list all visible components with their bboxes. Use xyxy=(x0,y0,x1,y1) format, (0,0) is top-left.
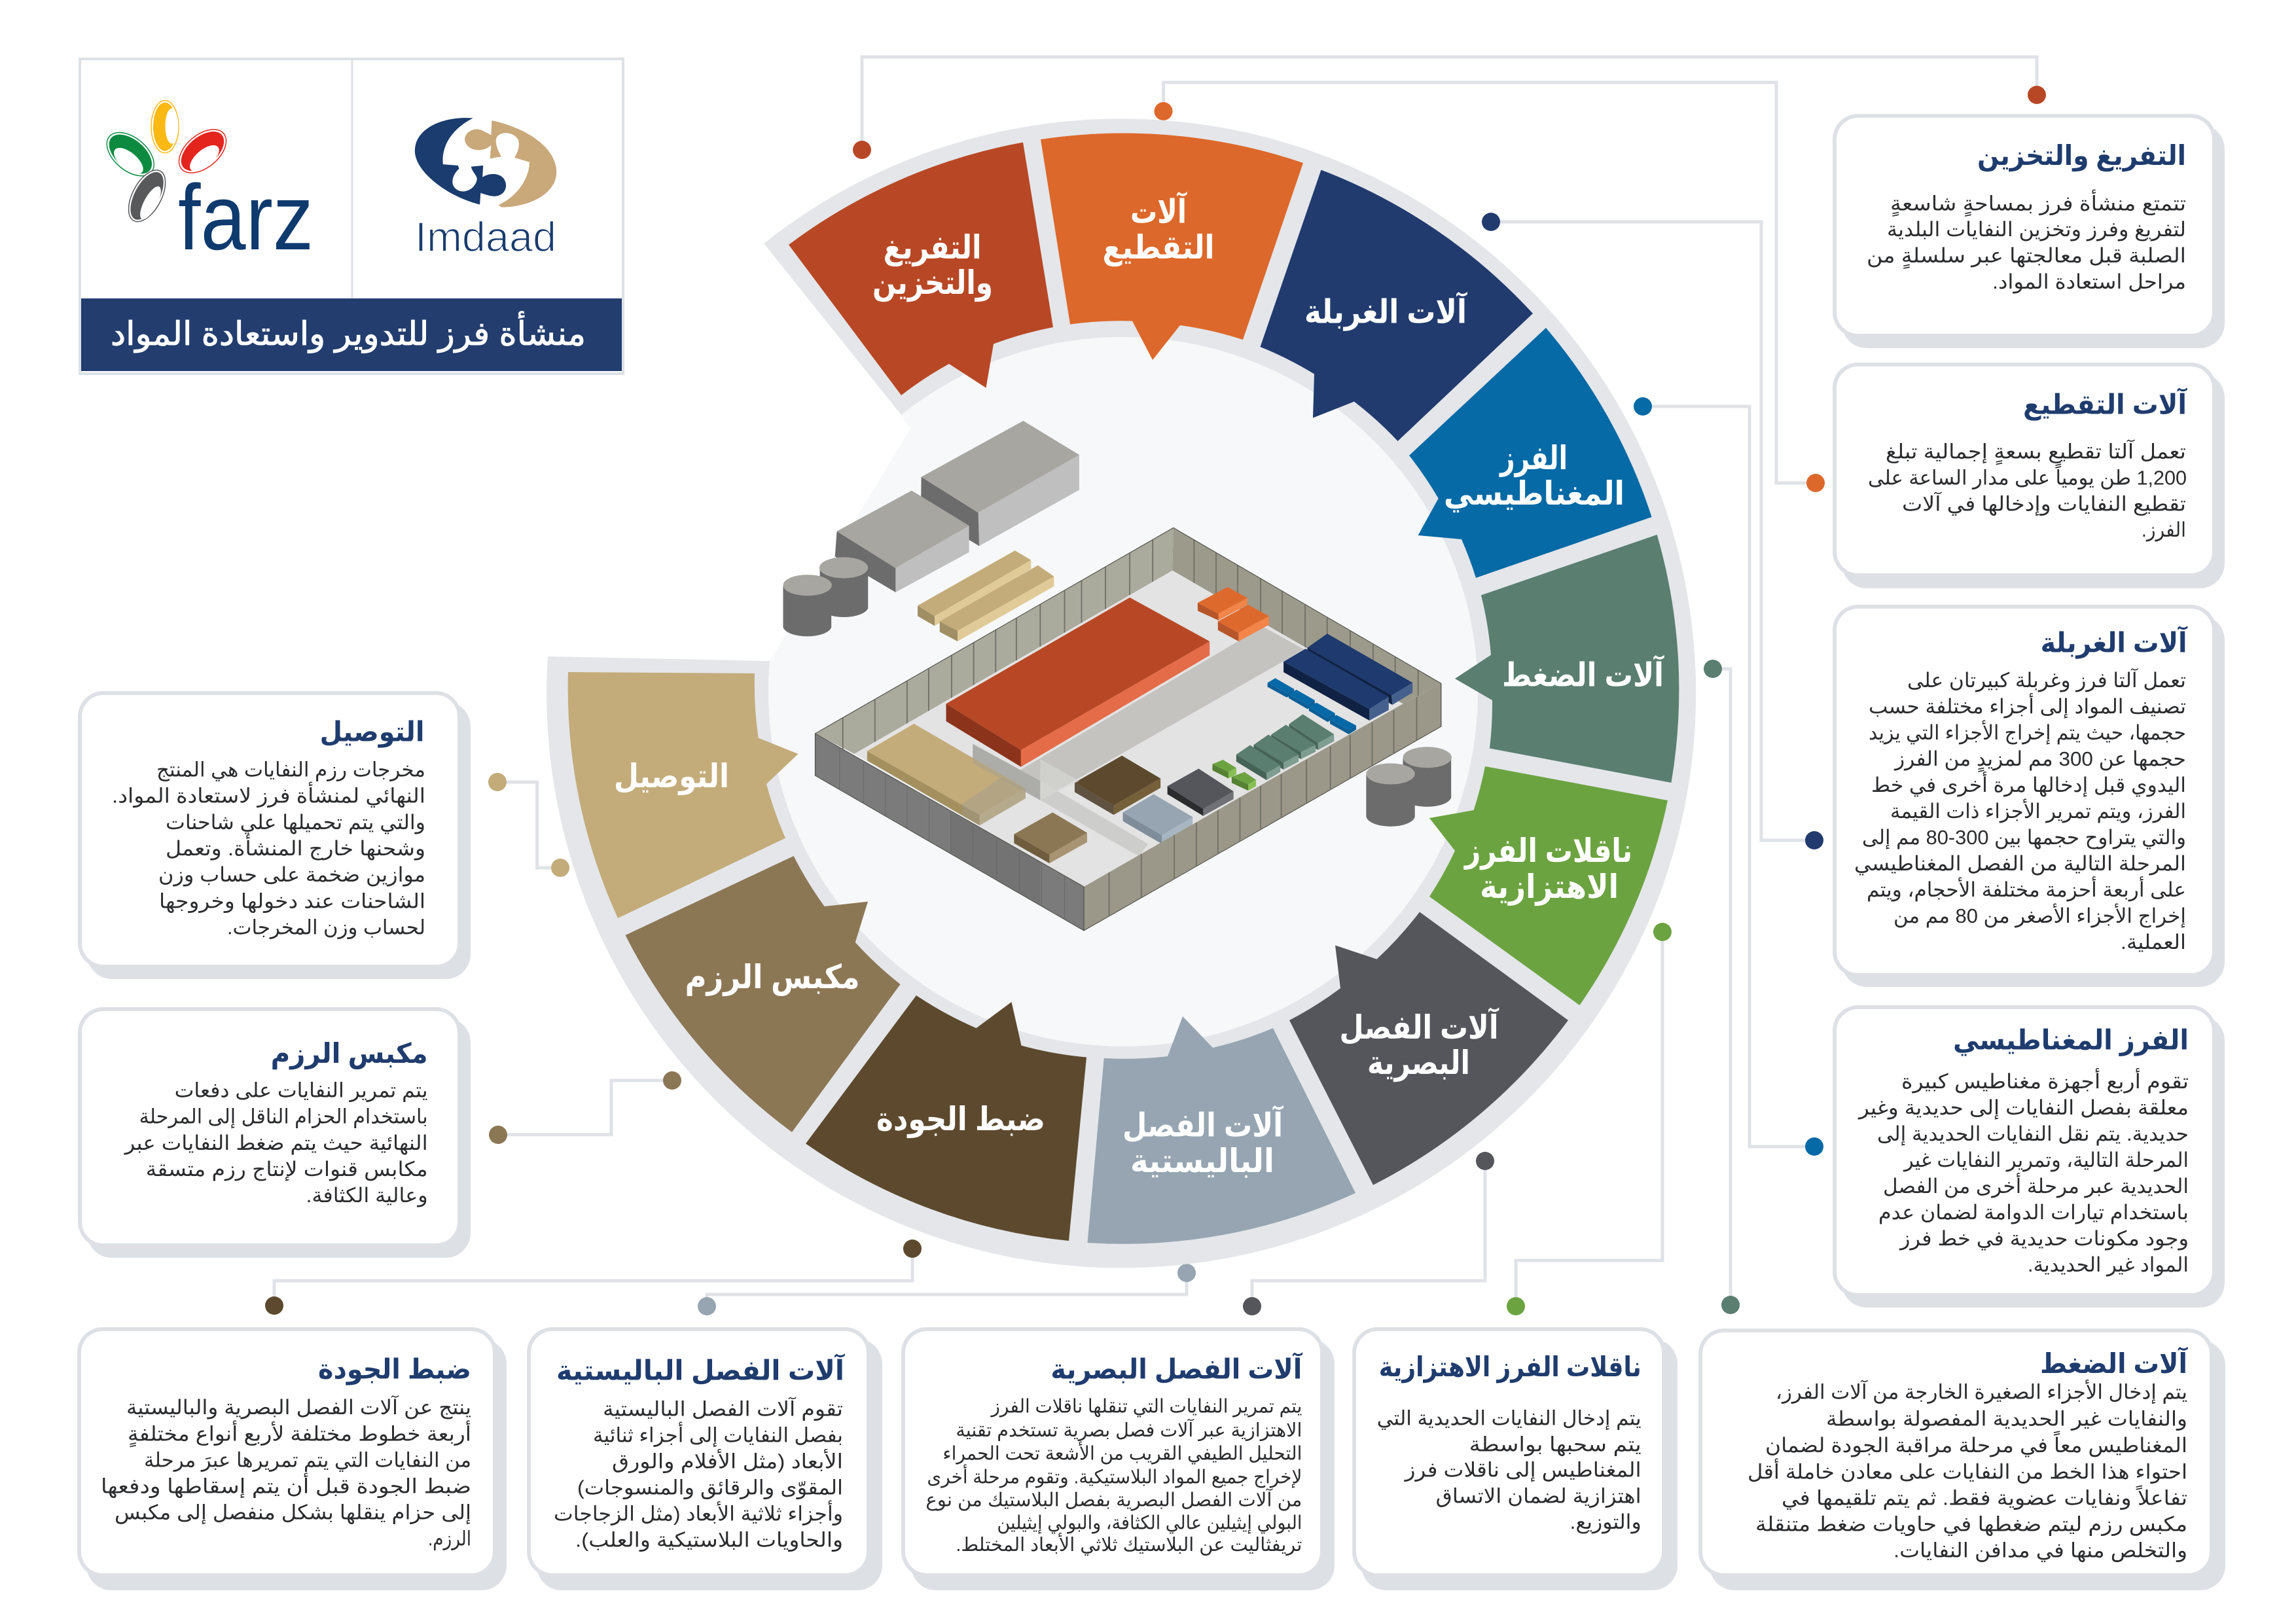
heading: ناقلات الفرز الاهتزازية xyxy=(1379,1351,1641,1383)
heading: الفرز المغناطيسي xyxy=(1953,1025,2189,1057)
body text: باستخدام تيارات الدوامة لضمان عدم xyxy=(1878,1201,2189,1224)
body text: وأجزاء ثلاثية الأبعاد (مثل الزجاجات xyxy=(554,1500,843,1525)
body text: والحاويات البلاستيكية والعلب). xyxy=(575,1528,843,1552)
logo: imdaad xyxy=(415,118,556,260)
logo: farz: farz xyxy=(178,166,314,270)
segment: compactors xyxy=(1455,535,1679,783)
panel: ballistic separators xyxy=(529,1329,882,1590)
outside tan slabs xyxy=(918,550,1054,641)
segment: optical separators xyxy=(1289,912,1568,1185)
body text: والتخلص منها في مدافن النفايات. xyxy=(1893,1539,2187,1562)
unit: dispatch tan xyxy=(867,724,1079,825)
body text: مخرجات رزم النفايات هي المنتج xyxy=(156,758,425,782)
body text xyxy=(925,1396,1302,1556)
building floor xyxy=(854,571,1403,887)
body text xyxy=(112,758,425,939)
body text: أربعة خطوط مختلفة لأربع أنواع مختلفةٍ xyxy=(128,1421,471,1448)
outside tanks right xyxy=(1366,747,1452,827)
body text: وجود مكونات حديدية في خط فرز xyxy=(1899,1227,2189,1251)
body text: يتم إدخال النفايات الحديدية التي xyxy=(1377,1407,1641,1431)
body text: موازين ضخمة على حساب وزن xyxy=(158,863,425,887)
body text: مراحل استعادة المواد. xyxy=(1992,270,2186,294)
segment: delivery xyxy=(568,672,798,918)
body text: لتفريغ وفرز وتخزين النفايات البلدية xyxy=(1887,218,2186,241)
body text: الحديدية عبر مرحلة أخرى من الفصل xyxy=(1883,1173,2189,1198)
heading: ضبط الجودة xyxy=(318,1354,471,1386)
body text: يتم تمرير النفايات التي تنقلها ناقلات الفرز xyxy=(990,1396,1302,1418)
segment: vibrating conveyors: ناقلات الفرز xyxy=(1463,832,1632,870)
unit: optical dark grey xyxy=(1168,768,1234,816)
heading: مكبس الرزم xyxy=(271,1038,428,1070)
body text: الصلبة قبل معالجتها عبر سلسلةٍ من xyxy=(1867,244,2186,269)
heading: آلات التقطيع xyxy=(2023,388,2188,421)
building back walls xyxy=(816,527,1441,754)
body text xyxy=(101,1395,471,1551)
heading: آلات الضغط xyxy=(2040,1347,2189,1379)
unit: baler brown xyxy=(1014,812,1087,863)
panel: quality control xyxy=(79,1329,507,1590)
body text: مكابس قنوات لإنتاج رزم متسقة xyxy=(146,1158,428,1181)
connector dots xyxy=(265,86,2046,1315)
segment: compactors: آلات الضغط xyxy=(1502,655,1665,694)
body text xyxy=(1867,189,2186,294)
segment: ballistic separators: الباليستية xyxy=(1130,1143,1274,1179)
inner pale disc xyxy=(768,337,1478,1046)
panel: unloading and storage xyxy=(1835,116,2225,348)
body text: لحساب وزن المخرجات. xyxy=(227,916,425,939)
body text: تقطيع النفايات وإدخالها في آلات xyxy=(1902,491,2186,516)
floor aisles xyxy=(973,626,1304,856)
body text: من النفايات التي يتم تمريرها عبرَ مرحلة xyxy=(144,1449,471,1472)
body text xyxy=(554,1396,843,1552)
body text: المغناطيس إلى ناقلات فرز xyxy=(1404,1459,1641,1482)
segment: optical separators: البصرية xyxy=(1367,1044,1470,1082)
unit: ballistic light blue xyxy=(1123,794,1193,844)
segment: ballistic separators xyxy=(1088,1016,1355,1244)
panel: baling press xyxy=(80,1009,471,1258)
body text: المرحلة التالية من الفصل المغناطيسي xyxy=(1854,852,2186,876)
panel: compactors xyxy=(1700,1330,2225,1590)
unit: magnets blue xyxy=(1268,678,1356,734)
body text: الرزم. xyxy=(428,1527,471,1551)
body text: إلى حزام ينقلها بشكل منفصل إلى مكبس xyxy=(115,1501,471,1525)
body text: 1,200 طن يومياً على مدار الساعة على xyxy=(1868,463,2187,490)
logo: imdaad: Imdaad xyxy=(415,213,556,260)
unit: quality control dark brown xyxy=(1075,756,1160,815)
isometric facility illustration xyxy=(783,421,1452,931)
body text xyxy=(1377,1407,1641,1534)
heading: التفريغ والتخزين xyxy=(1977,140,2186,172)
body text: والنفايات غير الحديدية المفصولة بواسطة xyxy=(1826,1407,2187,1431)
body text: تصنيف المواد إلى أجزاء مختلفة حسب xyxy=(1869,693,2186,719)
heading: التوصيل xyxy=(319,717,424,749)
body text: الأبعاد (مثل الأفلام والورق xyxy=(612,1448,843,1473)
body text: من آلات الفصل البصرية بفصل البلاستيك من نوع xyxy=(925,1488,1302,1511)
panel: shredders xyxy=(1835,365,2225,588)
body text: اليدوي قبل إدخالها مرة أخرى في خط xyxy=(1871,772,2186,797)
panel: vibrating conveyors xyxy=(1354,1329,1677,1590)
body text: تقوم أربع أجهزة مغناطيس كبيرة xyxy=(1901,1068,2189,1094)
segment: trommel screens xyxy=(1261,170,1533,441)
panel: optical separators xyxy=(903,1329,1335,1590)
body text: اهتزازية لضمان الاتساق xyxy=(1436,1485,1641,1508)
body text: المقوّى والرقائق والمنسوجات) xyxy=(577,1476,843,1499)
segment: quality control xyxy=(806,995,1086,1241)
body text: يتم تمرير النفايات على دفعات xyxy=(175,1079,428,1103)
body text: يتم سحبها بواسطة xyxy=(1469,1433,1641,1456)
logo: farz xyxy=(99,101,314,270)
body text xyxy=(1868,438,2187,542)
segment: optical separators: آلات الفصل xyxy=(1339,1007,1499,1046)
heading: آلات الغربلة xyxy=(2041,626,2188,659)
body text: تريفثاليت عن البلاستيك ثلاثي الأبعاد المختلط. xyxy=(956,1532,1302,1556)
body text: إخراج الأجزاء الأصغر من 80 مم من xyxy=(1893,903,2186,928)
body text: باستخدام الحزام الناقل إلى المرحلة xyxy=(139,1105,428,1129)
body text: والتوزيع. xyxy=(1570,1510,1641,1534)
panel: logo header xyxy=(80,59,623,374)
body text: مكبس رزم ليتم ضغطها في حاويات ضغط متنقلة xyxy=(1755,1512,2187,1536)
body text: المواد غير الحديدية. xyxy=(2028,1253,2189,1277)
body text: النهائية حيث يتم ضغط النفايات عبر xyxy=(124,1132,428,1155)
segment: shredders: التقطيع xyxy=(1102,229,1215,267)
unit: conveyors green xyxy=(1212,760,1256,791)
body text xyxy=(124,1079,428,1207)
body text: احتواء هذا الخط من النفايات على معادن خاملة أقل xyxy=(1748,1458,2187,1484)
body text: الفرز، ويتم تمرير الأجزاء ذات القيمة xyxy=(1890,798,2186,823)
body text: لإخراج جميع المواد البلاستيكية. وتقوم مرحلة أخرى xyxy=(927,1464,1302,1489)
body text: النهائي لمنشأة فرز لاستعادة المواد. xyxy=(112,782,425,808)
unit: storage hall red xyxy=(946,597,1210,767)
unit: compactors green-grey xyxy=(1236,714,1334,780)
body text: حجمها عن 300 مم لمزيدٍ من الفرز xyxy=(1893,747,2186,772)
outer grey ring xyxy=(547,118,1696,1268)
body text: حجمها، حيث يتم إخراج الأجزاء التي يزيد xyxy=(1869,720,2186,745)
body text: تقوم آلات الفصل الباليستية xyxy=(603,1396,843,1421)
title band: منشأة فرز للتدوير واستعادة المواد xyxy=(111,311,586,353)
segment: unloading and storage xyxy=(789,143,1053,395)
body text: المرحلة التالية، وتمرير النفايات غير xyxy=(1903,1149,2189,1172)
body text: تعمل آلتا فرز وغربلة كبيرتان على xyxy=(1907,668,2186,692)
segment: shredders: آلات xyxy=(1130,192,1188,230)
body text: وعالية الكثافة. xyxy=(306,1184,428,1207)
segment: trommel screens: آلات الغربلة xyxy=(1304,292,1468,332)
unit: trommels navy xyxy=(1283,633,1412,721)
body text: الفرز. xyxy=(2142,518,2186,542)
body text xyxy=(1748,1380,2187,1562)
body text xyxy=(1857,1068,2189,1277)
segment: magnetic sorting: الفرز xyxy=(1499,440,1568,478)
body text: يتم إدخال الأجزاء الصغيرة الخارجة من آلات الفرز، xyxy=(1776,1380,2187,1404)
body text: المغناطيس معاً في مرحلة مراقبة الجودة لضمان xyxy=(1765,1431,2187,1457)
body text: العملية. xyxy=(2121,931,2186,954)
segment: magnetic sorting: المغناطيسي xyxy=(1444,475,1624,512)
segment: unloading and storage: والتخزين xyxy=(872,264,993,302)
body text: تتمتع منشأة فرز بمساحةٍ شاسعةٍ xyxy=(1890,189,2186,217)
building front walls xyxy=(816,527,1441,931)
body text: والتي يتم تحميلها علي شاحنات xyxy=(166,811,425,834)
connector lines xyxy=(274,57,2037,1306)
segment: ballistic separators: آلات الفصل xyxy=(1122,1105,1284,1144)
body text xyxy=(1854,668,2186,954)
title band xyxy=(81,298,622,371)
body text: ينتج عن آلات الفصل البصرية والباليستية xyxy=(126,1395,471,1419)
panel: magnetic sorting xyxy=(1835,1007,2225,1308)
segment: baling press: مكبس الرزم xyxy=(685,959,860,997)
segment: quality control: ضبط الجودة xyxy=(876,1101,1045,1139)
outside tanks left xyxy=(783,557,868,636)
body text: على أربعة أحزمة مختلفة الأحجام، ويتم xyxy=(1867,876,2186,902)
segment: magnetic sorting xyxy=(1409,328,1652,578)
body text: الشاحنات عند دخولها وخروجها xyxy=(159,889,425,913)
segment: unloading and storage: التفريغ xyxy=(884,229,982,267)
segment: baling press xyxy=(626,856,901,1132)
unit: shredders orange xyxy=(1198,587,1269,641)
body text: الاهتزازية عبر آلات فصل بصرية تستخدم تقنية xyxy=(956,1418,1302,1441)
body text: والتي يتراوح حجمها بين 300-80 مم إلى xyxy=(1862,826,2186,849)
body text: وشحنها خارج المنشأة. وتعمل xyxy=(166,834,425,861)
segment: delivery: التوصيل xyxy=(614,758,729,796)
segment: vibrating conveyors xyxy=(1429,766,1668,1005)
body text: معلقة بفصل النفايات إلى حديدية وغير xyxy=(1857,1096,2189,1120)
body text: ضبط الجودة قبل أن يتم إسقاطها ودفعها xyxy=(101,1473,471,1499)
heading: آلات الفصل البصرية xyxy=(1050,1353,1303,1386)
outside storage boxes xyxy=(835,421,1079,592)
panel: trommel screens xyxy=(1835,607,2225,987)
body text: بفصل النفايات إلى أجزاء ثنائية xyxy=(593,1421,843,1447)
heading: آلات الفصل الباليستية xyxy=(556,1353,846,1385)
panel: delivery xyxy=(80,693,471,979)
body text: تفاعلاً ونفايات عضوية فقط. ثم يتم تلقيمها في xyxy=(1782,1485,2187,1510)
segment: shredders xyxy=(1041,134,1303,360)
body text: البولي إيثيلين عالي الكثافة، والبولي إيثيلين xyxy=(997,1513,1302,1535)
segment: vibrating conveyors: الاهتزازية xyxy=(1480,868,1619,906)
body text: تعمل آلتا تقطيع بسعةٍ إجمالية تبلغ xyxy=(1886,438,2186,465)
body text: حديدية. يتم نقل النفايات الحديدية إلى xyxy=(1877,1122,2189,1146)
body text: التحليل الطيفي القريب من الأشعة تحت الحمراء xyxy=(942,1441,1302,1465)
